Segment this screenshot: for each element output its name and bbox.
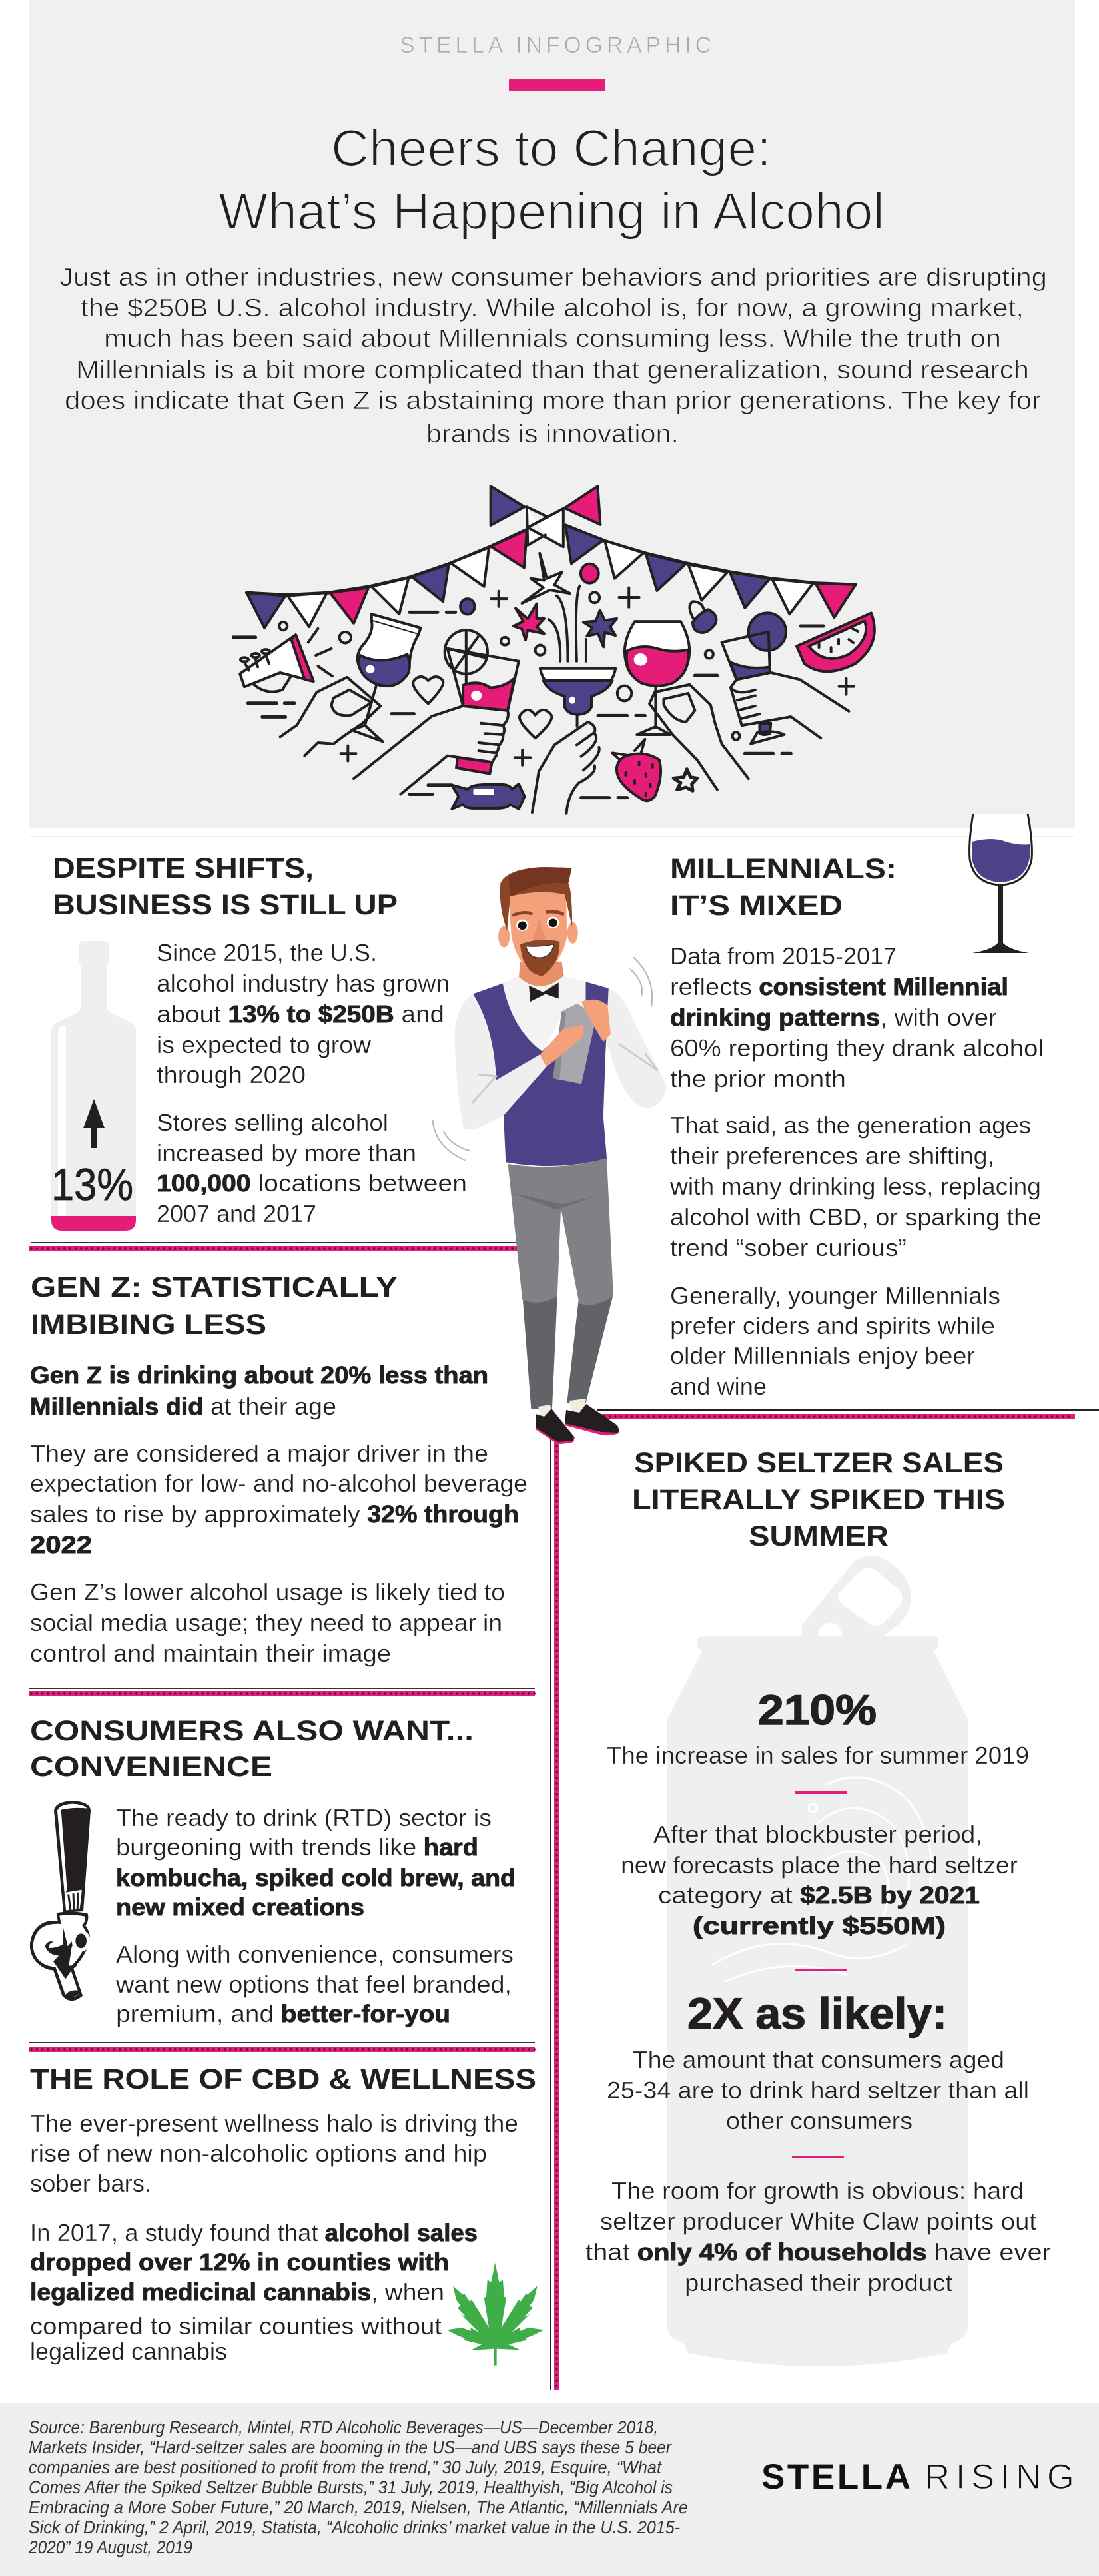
body text: their preferences are shifting,: [670, 1142, 994, 1169]
logo: Stella Rising: STELLA: [761, 2457, 911, 2497]
bowtie: [529, 982, 559, 1002]
icon: wine glass: [970, 814, 1032, 953]
mouth: [526, 944, 554, 958]
heading: CONVENIENCE: [30, 1751, 272, 1783]
body text: Gen Z’s lower alcohol usage is likely tied to: [30, 1578, 505, 1606]
forecast text: [621, 1821, 1018, 1939]
heading: MILLENNIALS:: [670, 853, 897, 885]
panel: despite shifts: [51, 852, 467, 1231]
star outline: [673, 769, 697, 791]
logo: Stella Rising: RISING: [924, 2457, 1074, 2497]
heading: [632, 1447, 1005, 1552]
title: What’s Happening in Alcohol: [218, 182, 885, 240]
right sleeve: [605, 988, 667, 1108]
panel: CBD and wellness: [30, 2063, 544, 2366]
can illustration: [667, 1556, 968, 2366]
body text: Stores selling alcohol: [157, 1109, 388, 1136]
body text: about 13% to $250B and: [157, 1000, 444, 1028]
body text: legalized cannabis: [30, 2338, 227, 2365]
body text: rise of new non-alcoholic options and hip: [30, 2140, 487, 2167]
panel: Gen Z: [30, 1271, 528, 1667]
bunting flags: [246, 486, 855, 628]
heading: IMBIBING LESS: [31, 1309, 266, 1341]
body text: want new options that feel branded,: [115, 1971, 512, 1998]
sources: Source: Barenburg Research, Mintel, RTD Alcoholic Beverages—US—December 2018,: [29, 2417, 658, 2437]
heading: SPIKED SELTZER SALES: [634, 1447, 1004, 1479]
body text: sober bars.: [30, 2170, 151, 2197]
confetti dashes, plus signs and circles: [233, 564, 854, 798]
body text: In 2017, a study found that alcohol sales: [30, 2219, 478, 2246]
heading: CONSUMERS ALSO WANT...: [30, 1715, 474, 1747]
illustration: bartender: [433, 867, 667, 1444]
icon: beer tap: [30, 1801, 91, 2001]
intro paragraph: [59, 264, 1047, 448]
heading: [53, 852, 398, 921]
heading: [30, 1715, 474, 1783]
body text: Data from 2015-2017: [670, 942, 897, 970]
body text: [669, 942, 1044, 1400]
intro paragraph: much has been said about Millennials consuming less. While the truth on: [104, 325, 1001, 353]
cherry: [689, 601, 716, 633]
growth text: that only 4% of households have ever: [585, 2238, 1051, 2266]
heading: [670, 853, 897, 922]
body text: increased by more than: [157, 1139, 416, 1167]
panel: header: [29, 0, 1075, 828]
sources: Comes After the Spiked Seltzer Bubble Bursts,” 31 July, 2019, Healthyish, “Big Alcohol is: [29, 2477, 673, 2497]
neck: [519, 962, 564, 986]
eyebrow label: STELLA INFOGRAPHIC: [400, 33, 711, 58]
strawberry: [612, 739, 661, 801]
left sleeve: [454, 994, 546, 1129]
intro paragraph: Millennials is a bit more complicated than that generalization, sound research: [76, 356, 1029, 384]
body text: control and maintain their image: [30, 1640, 391, 1667]
candy: [452, 784, 525, 809]
body text: 2022: [30, 1531, 92, 1558]
intro paragraph: Just as in other industries, new consumer behaviors and priorities are disrupting: [59, 264, 1047, 292]
sources: Embracing a More Sober Future,” 20 March, 2019, Nielsen, The Atlantic, “Millennials Are: [29, 2497, 688, 2517]
heading: LITERALLY SPIKED THIS: [632, 1484, 1005, 1516]
watermelon slice: [797, 613, 875, 671]
panel: convenience: [30, 1715, 516, 2027]
body text: kombucha, spiked cold brew, and: [116, 1864, 516, 1891]
logo: Stella Rising: [761, 2457, 1074, 2497]
body text: reflects consistent Millennial: [670, 973, 1008, 1000]
face: [508, 891, 567, 977]
body text: burgeoning with trends like hard: [116, 1833, 478, 1861]
panel: Millennials: [669, 814, 1044, 1400]
sources: Markets Insider, “Hard-seltzer sales are booming in the US—and UBS says these 5 beer: [29, 2437, 672, 2457]
body text: new mixed creations: [116, 1893, 364, 1921]
body text: Gen Z is drinking about 20% less than: [30, 1361, 488, 1389]
shoes and socks: [536, 1399, 619, 1444]
hair: [500, 867, 572, 931]
body text: trend “sober curious”: [670, 1234, 907, 1261]
forecast text: After that blockbuster period,: [653, 1821, 982, 1848]
body text: with many drinking less, replacing: [669, 1173, 1041, 1200]
pink separator: [795, 1969, 847, 1971]
body text: Millennials did at their age: [30, 1393, 336, 1420]
body text: The ever-present wellness halo is driving the: [30, 2110, 518, 2137]
right tumbler and hand: [722, 613, 849, 744]
body text: 2007 and 2017: [157, 1200, 316, 1227]
stat: 2X as likely: 2X as likely:: [687, 1989, 947, 2038]
body text: That said, as the generation ages: [670, 1112, 1031, 1139]
heading: GEN Z: STATISTICALLY: [31, 1271, 398, 1303]
motion lines: [433, 958, 652, 1160]
body text: through 2020: [157, 1061, 306, 1088]
trousers: [522, 1294, 557, 1409]
coupe glass: [532, 669, 615, 814]
icon: cannabis leaf: [447, 2263, 544, 2366]
beard: [520, 940, 559, 976]
heading: SUMMER: [749, 1520, 889, 1552]
stat caption: 25-34 are to drink hard seltzer than all: [607, 2077, 1029, 2104]
body text: alcohol with CBD, or sparking the: [670, 1203, 1042, 1231]
13% stat: 13%: [51, 1159, 133, 1210]
body text: older Millennials enjoy beer: [670, 1342, 975, 1369]
vest: [473, 982, 609, 1166]
sources: companies are best positioned to profit from the trend,” 30 July, 2019, Esquire, “What: [29, 2457, 662, 2477]
hands and shaker: [553, 1004, 597, 1084]
body text: the prior month: [670, 1065, 846, 1092]
forecast text: (currently $550M): [693, 1912, 946, 1939]
body text: 60% reporting they drank alcohol: [670, 1034, 1044, 1062]
intro paragraph: brands is innovation.: [426, 420, 679, 448]
party popper: [240, 629, 332, 692]
body text: compared to similar counties without: [30, 2312, 442, 2340]
heading: THE ROLE OF CBD & WELLNESS: [30, 2063, 536, 2095]
body text: and wine: [670, 1373, 767, 1400]
body text: 100,000 locations between: [157, 1169, 467, 1197]
shirt front: [503, 976, 587, 1052]
body text: sales to rise by approximately 32% through: [30, 1500, 519, 1528]
panel: footer: [0, 2403, 1099, 2576]
stat caption: The amount that consumers aged: [633, 2046, 1004, 2073]
heading: [31, 1271, 398, 1341]
growth text: [585, 2177, 1051, 2296]
stat caption: [607, 2046, 1029, 2134]
left wine glass and hand: [280, 614, 421, 756]
heading: BUSINESS IS STILL UP: [53, 889, 398, 921]
decorative dividers: [29, 1242, 1099, 2390]
growth text: purchased their product: [685, 2269, 952, 2296]
decorative rule under header: [29, 836, 1075, 837]
growth text: seltzer producer White Claw points out: [600, 2208, 1036, 2235]
body text: legalized medicinal cannabis , when: [30, 2278, 444, 2306]
growth text: The room for growth is obvious: hard: [611, 2177, 1024, 2204]
forecast text: category at $2.5B by 2021: [658, 1881, 980, 1909]
pink accent bar: [509, 79, 605, 91]
heading: IT’S MIXED: [670, 890, 843, 922]
pink separator: [795, 1791, 847, 1794]
bartender body: [433, 867, 667, 1409]
intro paragraph: the $250B U.S. alcohol industry. While alcohol is, for now, a growing market,: [81, 294, 1024, 322]
stat caption: other consumers: [726, 2107, 913, 2134]
heading: DESPITE SHIFTS,: [53, 852, 314, 884]
body text: prefer ciders and spirits while: [670, 1312, 995, 1339]
hearts: [413, 677, 551, 738]
pink cocktail with citrus slice: [354, 630, 519, 794]
sources: [28, 2417, 688, 2557]
pink separator: [792, 2156, 844, 2158]
bottle gauge: [51, 941, 136, 1231]
stat: 210%: 210%: [758, 1687, 877, 1734]
body text: [115, 1804, 516, 2027]
eyes: [512, 910, 564, 940]
title: [218, 119, 885, 240]
body text: expectation for low- and no-alcohol beverage: [30, 1470, 528, 1497]
pink wine glass and hand: [625, 621, 749, 790]
body text: The ready to drink (RTD) sector is: [116, 1804, 492, 1831]
body text: dropped over 12% in counties with: [30, 2248, 449, 2276]
body text: [157, 939, 467, 1227]
body text: They are considered a major driver in the: [30, 1440, 488, 1467]
illustration: party toast: [233, 486, 875, 814]
panel: spiked seltzer: [585, 1447, 1051, 2366]
sources: 2020” 19 August, 2019: [28, 2537, 192, 2557]
body text: [30, 1361, 528, 1667]
intro paragraph: does indicate that Gen Z is abstaining more than prior generations. The key for: [65, 387, 1041, 415]
sources: Sick of Drinking,” 2 April, 2019, Statista, “Alcoholic drinks’ market value in the U.S. 2015-: [29, 2517, 680, 2537]
title: Cheers to Change:: [331, 119, 771, 177]
forecast text: new forecasts place the hard seltzer: [621, 1851, 1018, 1879]
body text: is expected to grow: [157, 1031, 372, 1058]
body text: Along with convenience, consumers: [116, 1941, 514, 1968]
body text: alcohol industry has grown: [157, 970, 450, 997]
body text: Since 2015, the U.S.: [157, 939, 377, 966]
body text: premium, and better-for-you: [116, 2000, 450, 2027]
arrow up: [83, 1099, 105, 1148]
body text: Generally, younger Millennials: [670, 1282, 1000, 1309]
ears: [498, 926, 510, 948]
body text: drinking patterns , with over: [670, 1004, 997, 1031]
body text: social media usage; they need to appear in: [30, 1609, 502, 1636]
sparkler stars: [514, 553, 617, 661]
stat caption: The increase in sales for summer 2019: [607, 1742, 1029, 1769]
body text: [30, 2110, 518, 2365]
